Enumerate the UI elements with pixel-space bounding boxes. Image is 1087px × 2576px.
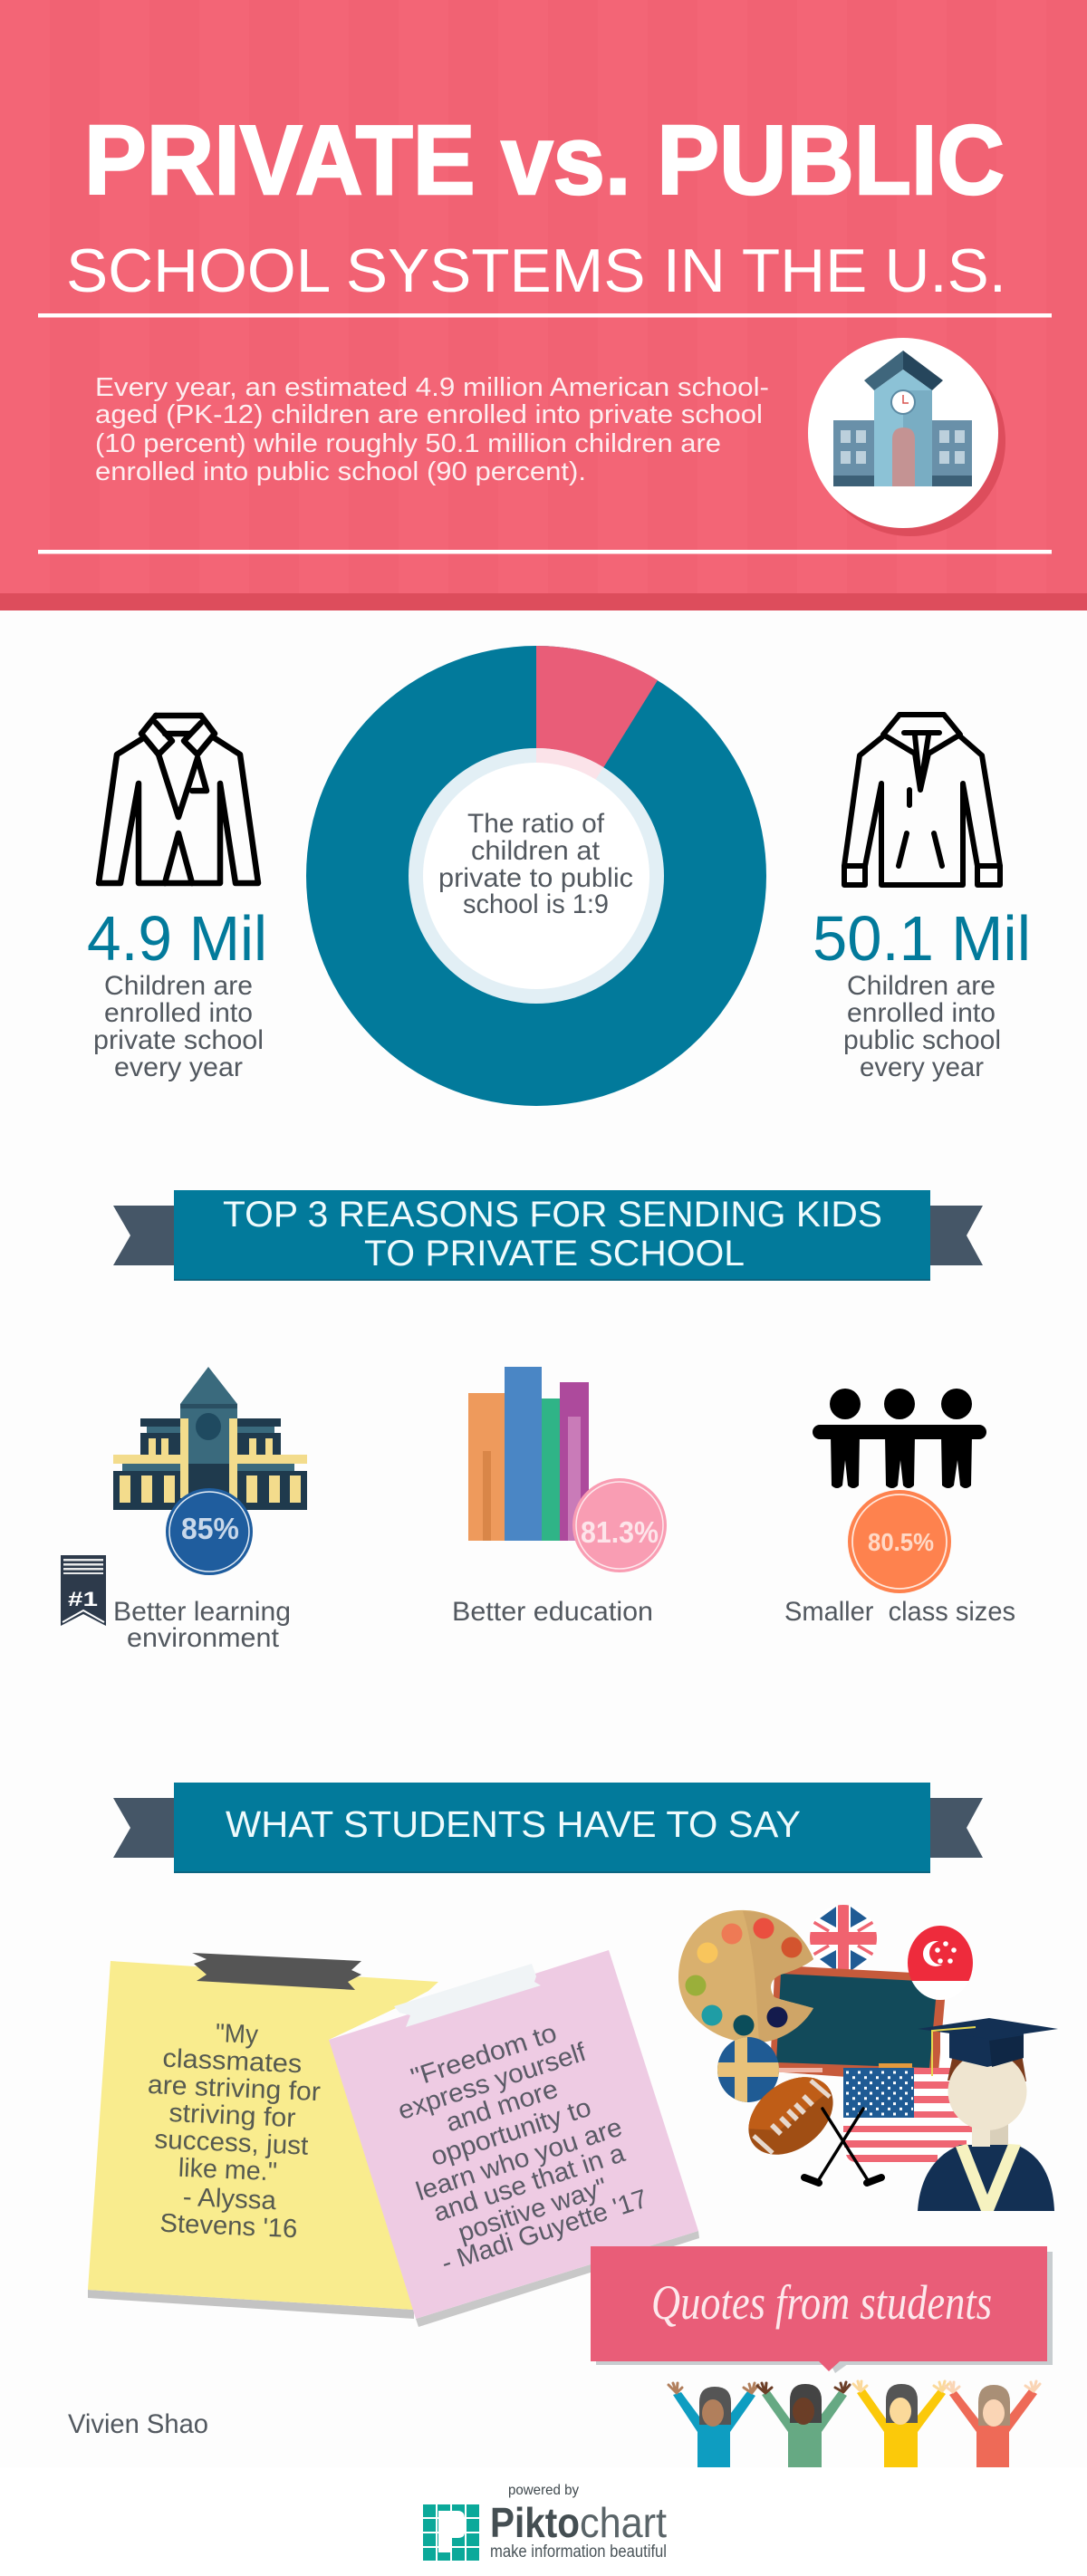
quote text: classmates — [162, 2044, 303, 2079]
stat: 50.1 million public: every year — [860, 1053, 984, 1082]
intro paragraph: Every year, an estimated 4.9 million American school- — [95, 373, 769, 402]
callout: quotes from students — [591, 2246, 1053, 2373]
banner: top 3 reasons — [113, 1190, 983, 1281]
illustration: student interests collage — [678, 1905, 1058, 2211]
note: yellow quote — [88, 1953, 438, 2319]
reason 1: better learning environment — [61, 1367, 307, 1653]
stat: 50.1 million public: 50.1 Mil — [813, 903, 1031, 974]
icon: three people — [813, 1389, 986, 1488]
callout: quotes from students: Quotes from students — [651, 2275, 992, 2330]
icon: paint palette — [678, 1910, 813, 2043]
icon: UK flag — [810, 1905, 877, 1972]
quote text: learn who you are — [413, 2113, 626, 2206]
quote text: opportunity to — [428, 2093, 595, 2172]
logo: piktochart footer: chart — [580, 2499, 667, 2546]
quote text: Stevens '16 — [159, 2209, 298, 2244]
stat: 50.1 million public: Children are — [847, 971, 996, 1001]
label — [113, 1597, 291, 1653]
stat: 4.9 million private: private school — [93, 1025, 264, 1055]
label: Better learning — [113, 1597, 291, 1627]
stat: 50.1 million public: public school — [843, 1025, 1001, 1055]
reason 3: smaller class sizes — [784, 1389, 1015, 1627]
person: yellow — [853, 2381, 948, 2467]
illustration: four students with raised arms — [669, 2381, 1040, 2467]
label: Smaller class sizes — [784, 1597, 1015, 1627]
intro paragraph: enrolled into public school (90 percent). — [95, 457, 586, 486]
author credit: Vivien Shao — [68, 2409, 208, 2439]
quote text: "Freedom to — [408, 2018, 561, 2092]
quote text — [147, 2019, 322, 2244]
header panel — [0, 0, 1087, 610]
person: green — [757, 2382, 850, 2467]
banner: top 3 reasons: TOP 3 REASONS FOR SENDING KIDS — [223, 1195, 882, 1235]
stat: 50.1 million public: enrolled into — [847, 998, 996, 1028]
intro paragraph — [95, 373, 769, 486]
icon: hooded jacket — [844, 715, 1000, 885]
title: private vs public: PRIVATE vs. PUBLIC — [84, 105, 1005, 216]
label: Better education — [452, 1597, 653, 1627]
quote text: - Madi Guyette '17 — [438, 2185, 651, 2278]
banner: what students have to say: WHAT STUDENTS HAVE TO SAY — [226, 1803, 801, 1845]
icon: football — [748, 2077, 833, 2155]
tape: dark — [192, 1953, 361, 1990]
logo: piktochart footer: make information beautiful — [490, 2542, 667, 2562]
quote text: striving for — [168, 2099, 296, 2133]
logo mosaic — [423, 2504, 479, 2561]
reason 2: better education — [452, 1367, 667, 1627]
icon: school building — [113, 1367, 307, 1510]
donut centre text: children at — [471, 836, 601, 866]
icon: graduate — [918, 2018, 1058, 2211]
footer background — [0, 2467, 1087, 2576]
quote text: success, just — [154, 2125, 309, 2161]
percentage badge 81.3%: 81.3% — [581, 1515, 659, 1549]
person: blue — [669, 2383, 758, 2467]
donut centre text: The ratio of — [467, 809, 605, 839]
percentage badge 80.5%: 80.5% — [868, 1528, 934, 1556]
note: pink quote — [329, 1950, 699, 2327]
stat: 4.9 million private: every year — [114, 1053, 243, 1082]
logo: piktochart footer — [423, 2483, 667, 2562]
banner: top 3 reasons: TO PRIVATE SCHOOL — [364, 1234, 745, 1274]
icon: Singapore flag — [906, 1925, 976, 2001]
icon: Swedish flag — [717, 2037, 779, 2102]
person: coral — [945, 2381, 1040, 2467]
tape: light — [394, 1964, 541, 2027]
quote text: positive way" — [455, 2173, 611, 2248]
percentage badge 80.5% — [848, 1490, 951, 1593]
icon: number one ribbon — [61, 1555, 106, 1626]
logo: piktochart footer: Pikto — [490, 2499, 580, 2546]
percentage badge 81.3% — [572, 1478, 667, 1572]
quote text: are striving for — [147, 2071, 322, 2107]
intro paragraph: (10 percent) while roughly 50.1 million children are — [95, 429, 721, 458]
quote text: and more — [442, 2074, 562, 2138]
stat: 4.9 million private: Children are — [104, 971, 253, 1001]
percentage badge 85% — [166, 1488, 253, 1575]
icon: American flag — [843, 2068, 974, 2163]
quote text: like me." — [178, 2154, 278, 2187]
donut centre text: school is 1:9 — [463, 889, 609, 919]
stat: 50.1 million public — [813, 903, 1031, 1082]
quote text: - Alyssa — [182, 2183, 277, 2216]
stat: 4.9 million private — [87, 903, 267, 1082]
icon: chalkboard — [770, 1966, 945, 2083]
subtitle: SCHOOL SYSTEMS IN THE U.S. — [66, 236, 1006, 305]
percentage badge 85%: 85% — [181, 1512, 239, 1545]
stat: 4.9 million private: 4.9 Mil — [87, 903, 267, 974]
icon: books — [468, 1367, 589, 1541]
quote text: express yourself — [395, 2038, 591, 2126]
quote text: "My — [215, 2019, 259, 2050]
icon: crossed hockey sticks — [804, 2109, 881, 2183]
icon: school building in circle — [808, 338, 1005, 536]
donut chart: private vs public — [306, 646, 766, 1106]
icon: number one ribbon: #1 — [68, 1588, 98, 1610]
banner: what students have to say — [113, 1783, 983, 1873]
quote text — [395, 2018, 651, 2278]
intro paragraph: aged (PK-12) children are enrolled into private school — [95, 400, 763, 429]
donut centre text — [438, 809, 633, 919]
donut centre text: private to public — [438, 863, 633, 893]
stat: 4.9 million private: enrolled into — [104, 998, 253, 1028]
quote text: and use that in a — [430, 2139, 630, 2228]
logo: piktochart footer: powered by — [508, 2483, 579, 2498]
label: environment — [127, 1623, 280, 1653]
icon: blazer jacket — [99, 716, 258, 883]
